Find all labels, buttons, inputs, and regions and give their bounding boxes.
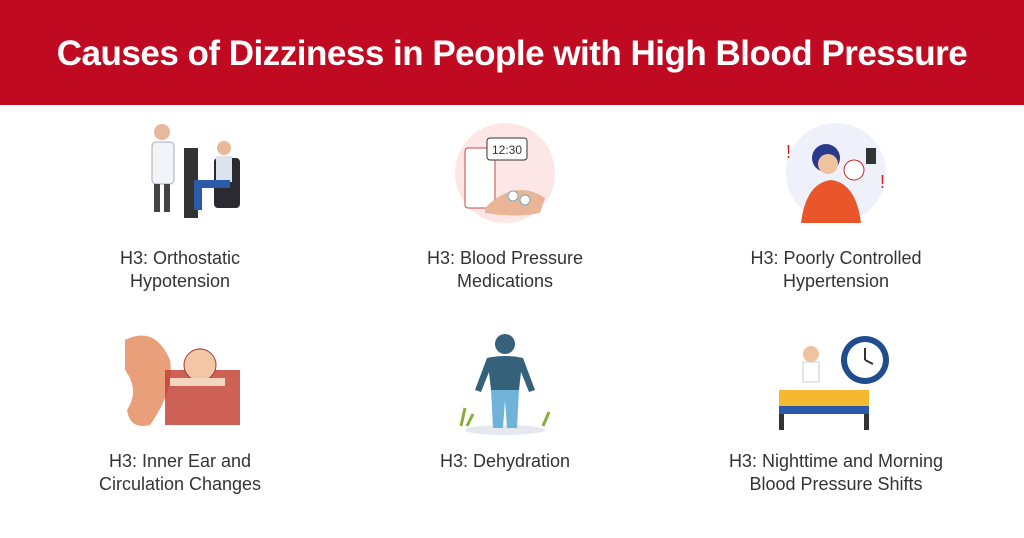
icon: person with monitor [786, 123, 886, 223]
item: inner ear [99, 336, 261, 494]
item: nighttime and morning shifts [729, 336, 943, 494]
label: H3: Orthostatic [120, 248, 240, 268]
title: Causes of Dizziness in People with High Blood Pressure [57, 34, 967, 73]
label [427, 248, 583, 291]
icon: person with monitor: ! [786, 142, 791, 162]
icon: person with monitor: ! [880, 172, 885, 192]
label: Blood Pressure Shifts [749, 474, 923, 494]
label: Hypotension [130, 271, 230, 291]
header band [0, 0, 1024, 105]
icon: ear anatomy [125, 336, 240, 426]
label: H3: Inner Ear and [109, 451, 251, 471]
item: dehydration [440, 334, 570, 471]
icon: doctor and patient [152, 124, 240, 218]
icon: clock and pills in hand: 12:30 [492, 143, 522, 157]
label: H3: Nighttime and Morning [729, 451, 943, 471]
label: Circulation Changes [99, 474, 261, 494]
label [750, 248, 922, 291]
item: blood pressure medications [427, 123, 583, 291]
label [120, 248, 240, 291]
icon: clock and pills in hand [455, 123, 555, 223]
label: Hypertension [783, 271, 889, 291]
label: H3: Dehydration [440, 451, 570, 471]
label: H3: Poorly Controlled [750, 248, 922, 268]
label [99, 451, 261, 494]
label: H3: Blood Pressure [427, 248, 583, 268]
item: poorly controlled hypertension [750, 123, 922, 291]
item: orthostatic hypotension [120, 124, 240, 291]
label: Medications [457, 271, 553, 291]
icon: person silhouette [460, 334, 550, 435]
label [729, 451, 943, 494]
icon: bed and alarm clock [779, 336, 889, 430]
